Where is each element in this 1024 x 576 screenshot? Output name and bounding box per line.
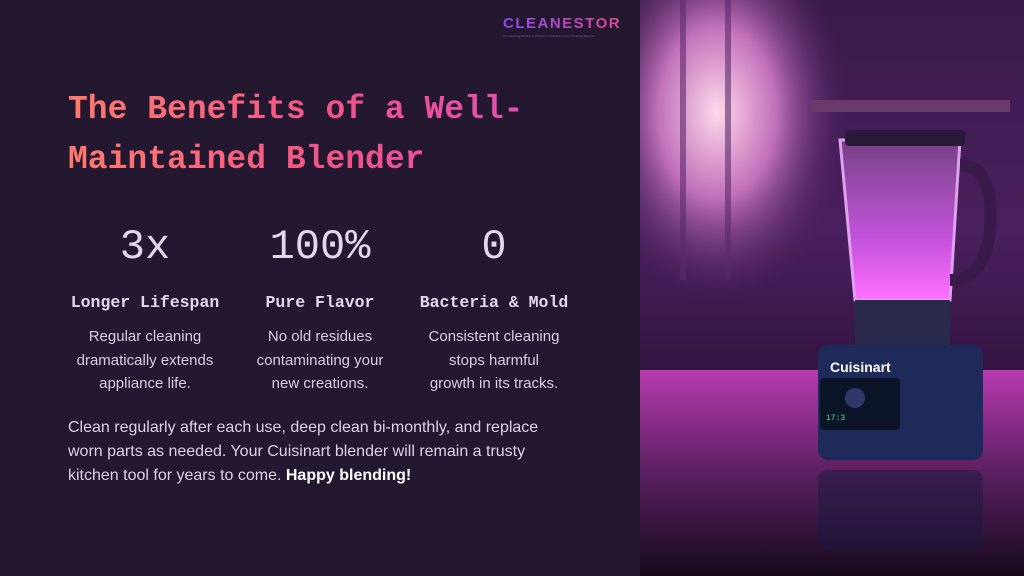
- logo: CLEANESTOR: [503, 15, 621, 32]
- stat: longer lifespan: 3x: [120, 223, 170, 271]
- stat: pure flavor: 100%: [270, 223, 370, 271]
- stat: pure flavor: [257, 223, 384, 392]
- logo: Pro Cleaning Guides and Service Journalism From Cleaning Experts: [503, 34, 594, 38]
- stat: bacteria: [420, 223, 568, 392]
- stat: bacteria: Consistent cleaning stops harmful growth in its tracks.: [429, 328, 559, 392]
- photo: blender in kitchen: Cuisinart: [830, 359, 891, 375]
- stat: longer lifespan: [71, 223, 219, 392]
- stat: longer lifespan: Longer Lifespan: [71, 293, 219, 312]
- closing paragraph: Clean regularly after each use, deep clean bi-monthly, and replace worn parts as needed. Your Cuisinart blender will remain a trusty kitchen tool for years to come. Happy blending!: [68, 419, 538, 484]
- title: Maintained Blender: [68, 141, 424, 178]
- stat: pure flavor: Pure Flavor: [266, 293, 374, 312]
- stat: bacteria: Bacteria & Mold: [420, 293, 568, 312]
- stat: bacteria: 0: [481, 223, 507, 271]
- title: [68, 85, 628, 185]
- photo: blender in kitchen: 17:3: [826, 414, 845, 423]
- photo: blender in kitchen: [640, 0, 1024, 576]
- stat: pure flavor: No old residues contaminating your new creations.: [257, 328, 383, 392]
- title: The Benefits of a Well-: [68, 91, 523, 128]
- stat: longer lifespan: Regular cleaning dramatically extends appliance life.: [77, 328, 213, 392]
